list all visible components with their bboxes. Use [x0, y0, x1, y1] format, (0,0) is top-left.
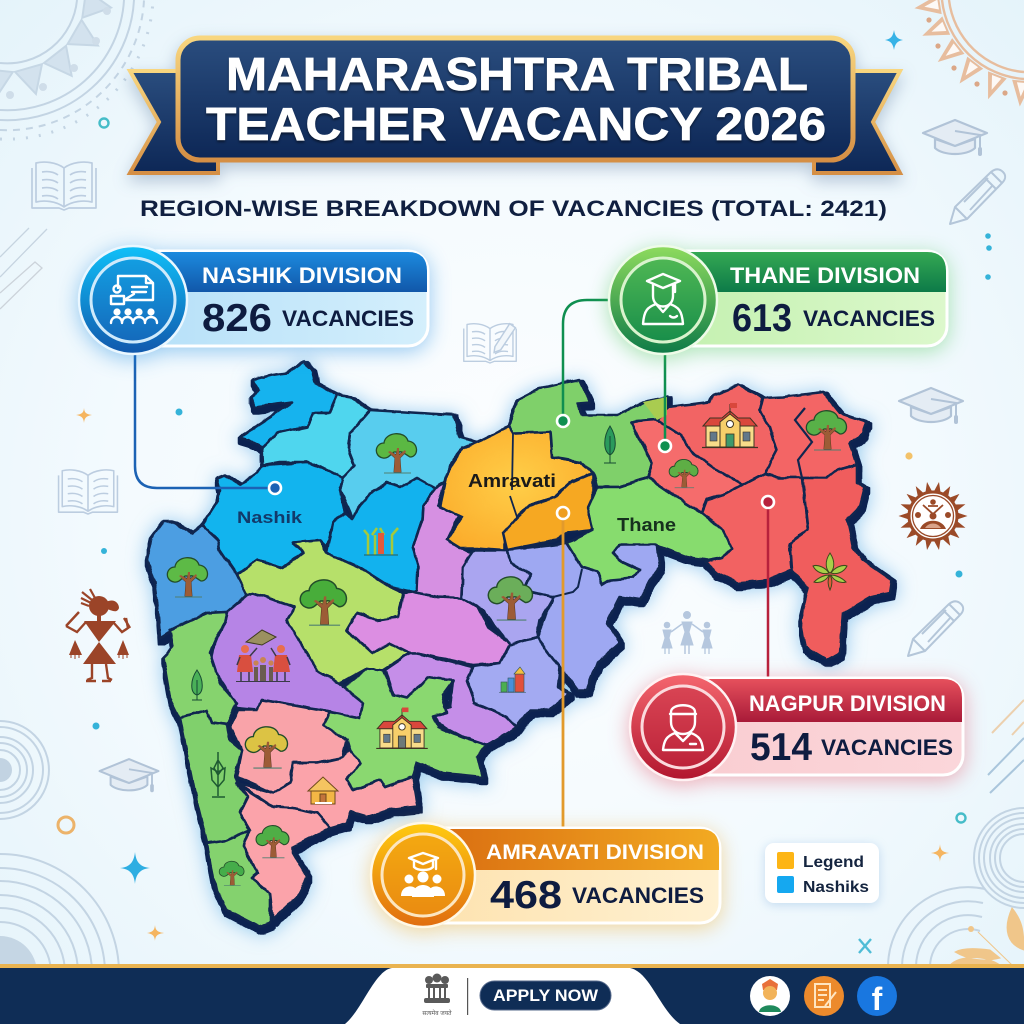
badge ring — [91, 258, 175, 342]
icon: cypress green west — [192, 670, 202, 700]
icon: graduation cap right — [899, 388, 963, 424]
icon: tree west blue — [167, 558, 208, 597]
region: green north — [508, 380, 667, 487]
icon: pencil top-right — [950, 169, 1005, 224]
map label: Amravati: Amravati — [468, 471, 556, 491]
icon: school red — [702, 403, 758, 448]
region: periwinkle south — [467, 637, 570, 727]
ribbon right tail — [814, 71, 900, 173]
region: Amravati north — [440, 427, 593, 550]
region: purple west — [210, 593, 367, 718]
card: Thane division — [609, 246, 947, 354]
icon: bar chart with house — [499, 667, 526, 692]
footer divider — [467, 978, 468, 1015]
decoration: concentric arcs bottom-left — [0, 854, 119, 973]
icon: warli tribal figure — [66, 589, 130, 681]
icon: small house — [308, 777, 338, 804]
red internal boundary — [795, 408, 812, 478]
title ribbon — [130, 38, 900, 173]
region: periwinkle east — [507, 543, 660, 690]
region: light green — [237, 540, 410, 683]
ribbon left tail — [130, 71, 218, 173]
footer stripe — [0, 964, 1024, 968]
unit: VACANCIES — [282, 306, 414, 331]
apply now button: APPLY NOW — [493, 987, 598, 1005]
region: green west middle — [180, 710, 250, 843]
value: 468 — [490, 874, 562, 917]
icon: tree pink south — [256, 826, 289, 858]
decoration: diagonal lines right — [988, 700, 1024, 793]
card header — [655, 252, 946, 292]
icon: book and pen — [464, 324, 516, 363]
decoration: concentric arcs left — [0, 721, 49, 819]
card header — [680, 679, 962, 722]
icon: tree light green — [300, 580, 346, 625]
badge — [630, 674, 736, 780]
footer band — [0, 968, 1024, 1024]
footer — [0, 964, 1024, 1024]
icon: tree green south — [219, 861, 244, 886]
value: 514 — [750, 726, 812, 769]
heading: NASHIK DIVISION — [202, 263, 402, 288]
badge ring — [621, 258, 705, 342]
title text line 2: TEACHER VACANCY 2026 — [206, 98, 826, 150]
icon: cypress green north — [604, 426, 616, 463]
badge — [79, 246, 187, 354]
icon: family with graduation cap — [236, 630, 290, 682]
card panel — [420, 828, 720, 923]
card panel — [655, 251, 947, 346]
social icon: facebook: f — [872, 981, 883, 1017]
decoration: diagonal lines top-left — [0, 228, 47, 309]
region: red west — [632, 420, 742, 513]
region: green west south — [207, 830, 270, 927]
connector: Thane west — [557, 300, 612, 427]
icon: tree yellow — [245, 727, 287, 768]
map of Maharashtra divisions — [147, 362, 892, 927]
region: Nashik north-west — [240, 362, 338, 448]
title panel — [178, 38, 853, 160]
unit: VACANCIES — [572, 883, 704, 908]
region: purple south — [385, 653, 517, 745]
region: Nashik central — [202, 462, 345, 575]
region: olive corner — [643, 397, 667, 420]
icon: tree Nashik north-east — [376, 434, 417, 473]
region: green west upper — [163, 612, 237, 725]
Amravati internal boundary — [510, 433, 517, 517]
region: Amravati south — [503, 473, 593, 550]
connector: Nagpur — [762, 496, 774, 680]
apply now button — [480, 981, 611, 1010]
legend text: Nashiks: Nashiks — [803, 879, 869, 896]
subtitle: REGION-WISE BREAKDOWN OF VACANCIES (TOTAL: 2421) — [140, 196, 887, 221]
social icon: person — [750, 976, 790, 1016]
badge ring — [642, 686, 724, 768]
region: red north-east — [760, 392, 867, 478]
icon: open book top-left — [32, 162, 96, 210]
region: Nashik north — [262, 395, 370, 478]
region: periwinkle with tree — [462, 550, 553, 645]
icon: tree red north-east — [806, 411, 847, 450]
region: red south-east — [790, 465, 892, 660]
connector: Thane east — [659, 350, 671, 452]
region: pink north — [230, 700, 347, 793]
region: pink purple central — [347, 592, 510, 665]
card: Nagpur division — [630, 674, 963, 780]
decoration: top-right mandala — [913, 0, 1024, 107]
icon: national emblem: सत्यमेव जयते — [422, 1009, 452, 1017]
region: green central — [323, 668, 487, 790]
region: red school — [657, 385, 777, 485]
card panel — [125, 251, 428, 346]
card: Amravati division — [371, 823, 720, 927]
icon: tribal sun emblem — [898, 481, 968, 551]
icon: bamboo Nashik east — [364, 528, 398, 555]
decoration: concentric arcs bottom-right with leaves — [888, 887, 1024, 966]
region: Nashik north-east — [340, 410, 480, 518]
social icon: facebook — [857, 976, 897, 1017]
icon: leaf emblem — [813, 553, 847, 590]
icon: plant green west — [211, 752, 225, 797]
card header — [125, 252, 427, 292]
icon: cap and group — [401, 853, 445, 897]
swatch: blue — [777, 876, 794, 893]
icon: graduation cap bottom-left — [100, 759, 158, 792]
connector: Amravati — [557, 507, 569, 830]
region: red central — [702, 473, 808, 583]
map label: Thane: Thane — [617, 515, 676, 535]
connector: Nashik — [135, 350, 281, 494]
icon: people silhouette group — [662, 612, 712, 654]
value: 826 — [202, 297, 272, 340]
icon: graduate — [643, 274, 683, 324]
legend text: Legend: Legend — [803, 854, 864, 871]
decoration: concentric arcs right — [974, 808, 1024, 908]
decoration: top-left mandala — [0, 0, 153, 139]
card: Nashik division — [79, 246, 428, 354]
badge ring — [382, 834, 464, 916]
footer white tab — [345, 968, 680, 1024]
value: 613 — [732, 297, 792, 340]
region: purple north — [413, 482, 473, 598]
title text line 1: MAHARASHTRA TRIBAL — [226, 48, 808, 100]
heading: AMRAVATI DIVISION — [486, 841, 704, 864]
icon: teacher at board — [111, 276, 157, 323]
unit: VACANCIES — [821, 735, 953, 760]
card header — [420, 829, 719, 870]
region: pink south — [238, 785, 330, 920]
icon: pencil right — [908, 601, 963, 656]
map label: Nashik: Nashik — [237, 508, 303, 527]
badge — [371, 823, 475, 927]
icon: school green — [376, 708, 428, 748]
region: west blue — [147, 522, 247, 638]
region: pink middle — [237, 750, 418, 828]
region: Nashik east — [327, 478, 435, 592]
card panel — [680, 678, 963, 775]
badge — [609, 246, 717, 354]
icon: open book left — [59, 470, 117, 514]
heading: NAGPUR DIVISION — [749, 691, 946, 716]
icon: teacher bust — [663, 705, 703, 750]
icon: tree red west — [669, 459, 698, 488]
periwinkle internal boundary — [553, 569, 582, 597]
region: Thane — [567, 478, 732, 585]
legend box — [765, 843, 879, 903]
icon: national emblem — [422, 974, 452, 1017]
heading: THANE DIVISION — [730, 263, 920, 288]
icon: graduation cap top-right — [923, 120, 987, 156]
unit: VACANCIES — [803, 306, 935, 331]
swatch: orange — [777, 852, 794, 869]
social icon: document — [804, 976, 844, 1016]
icon: tree periwinkle — [488, 577, 532, 620]
legend — [765, 843, 879, 903]
